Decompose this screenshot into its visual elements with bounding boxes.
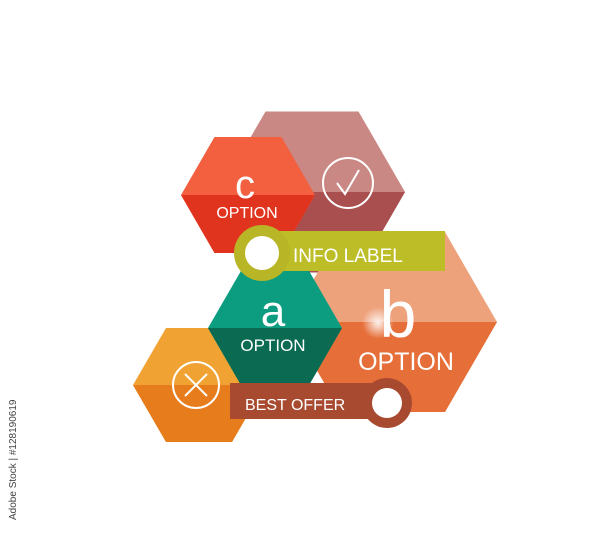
- hex: c option: OPTION: [216, 205, 278, 222]
- info label: [234, 225, 445, 281]
- info label: INFO LABEL: [293, 246, 403, 267]
- best offer label: [230, 378, 412, 428]
- hex: c option: [181, 137, 315, 253]
- hex: b option: [289, 232, 497, 412]
- hex: a option: OPTION: [240, 336, 306, 355]
- icon: x circle: [173, 362, 219, 408]
- icon: check circle: [323, 158, 373, 208]
- hex: b option: b: [380, 277, 416, 351]
- hex: check (pink-brown): [219, 112, 405, 272]
- hex: a option: [208, 270, 342, 386]
- hex: a option: a: [261, 287, 286, 336]
- hex: c option: c: [235, 163, 255, 207]
- hex: b option: OPTION: [358, 348, 454, 376]
- watermark id: Adobe Stock | #128190619: [8, 399, 19, 520]
- hex: x option (orange): [133, 328, 265, 442]
- best offer label: BEST OFFER: [245, 397, 345, 414]
